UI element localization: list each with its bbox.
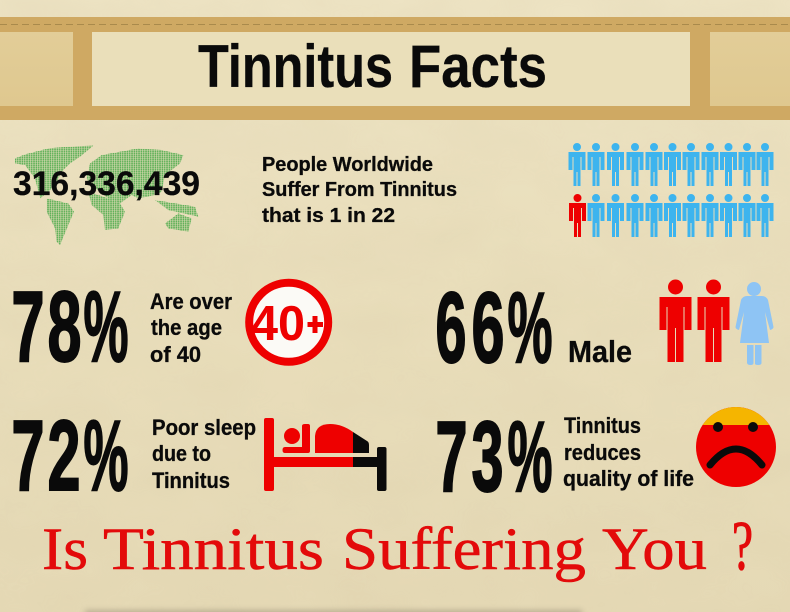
closing question: ? [732,508,753,585]
stat: 78%: 7 [12,271,44,383]
stat: 73%: 3 [472,401,504,513]
text: are over the age of 40: of 40 [150,342,201,367]
stat: 73%: 7 [436,401,468,513]
text: people worldwide: that is 1 in 22 [262,205,395,227]
icon: two men and one woman [660,280,774,365]
closing question: You [602,516,707,582]
text: poor sleep due to tinnitus: due to [152,441,211,466]
text: people worldwide: Suffer From Tinnitus [262,179,457,201]
text: people worldwide [262,154,457,227]
title: Tinnitus [198,33,393,100]
closing question: Suffering [342,516,586,582]
stat: 72%: 2 [48,400,80,512]
text: tinnitus reduces quality of life: Tinnitus [564,413,641,438]
icon: people 1 in 22 [568,143,774,237]
text: people worldwide: People Worldwide [262,154,433,176]
closing question [42,508,753,585]
text: are over the age of 40 [150,289,232,367]
stat: 73% [436,401,552,513]
text: poor sleep due to tinnitus: Poor sleep [152,415,256,440]
icon: person in bed [264,418,386,491]
title: Facts [409,33,547,100]
text: tinnitus reduces quality of life: quality of life [563,466,694,491]
stat: 73%: % [508,401,552,513]
stat: 66%: % [508,272,552,384]
icon: sad face [696,407,776,487]
title [198,33,547,100]
stat: 66%: 6 [472,272,504,384]
global sufferers count: 316,336,439 [13,165,200,203]
text: poor sleep due to tinnitus [152,415,256,493]
closing question: Is [42,516,88,582]
closing question: Tinnitus [103,516,324,582]
text: are over the age of 40: Are over [150,289,232,314]
text: are over the age of 40: the age [151,315,222,340]
icon: dotted world map [15,146,198,245]
stat: 72%: % [84,400,128,512]
stat: 78%: % [84,271,128,383]
icon: 40+ badge [249,283,328,362]
text: tinnitus reduces quality of life [563,413,694,491]
stat: 78%: 8 [48,271,82,383]
icon: 40+ badge: 40 [251,297,305,351]
text: tinnitus reduces quality of life: reduces [564,440,641,465]
stat: 72% [12,400,128,512]
header band [0,17,790,120]
stat: 72%: 7 [12,400,44,512]
stat: 66%: 6 [436,272,466,384]
text: male: Male [568,334,632,369]
text: poor sleep due to tinnitus: Tinnitus [152,468,230,493]
stat: 66% [436,272,552,384]
stat: 78% [12,271,128,383]
